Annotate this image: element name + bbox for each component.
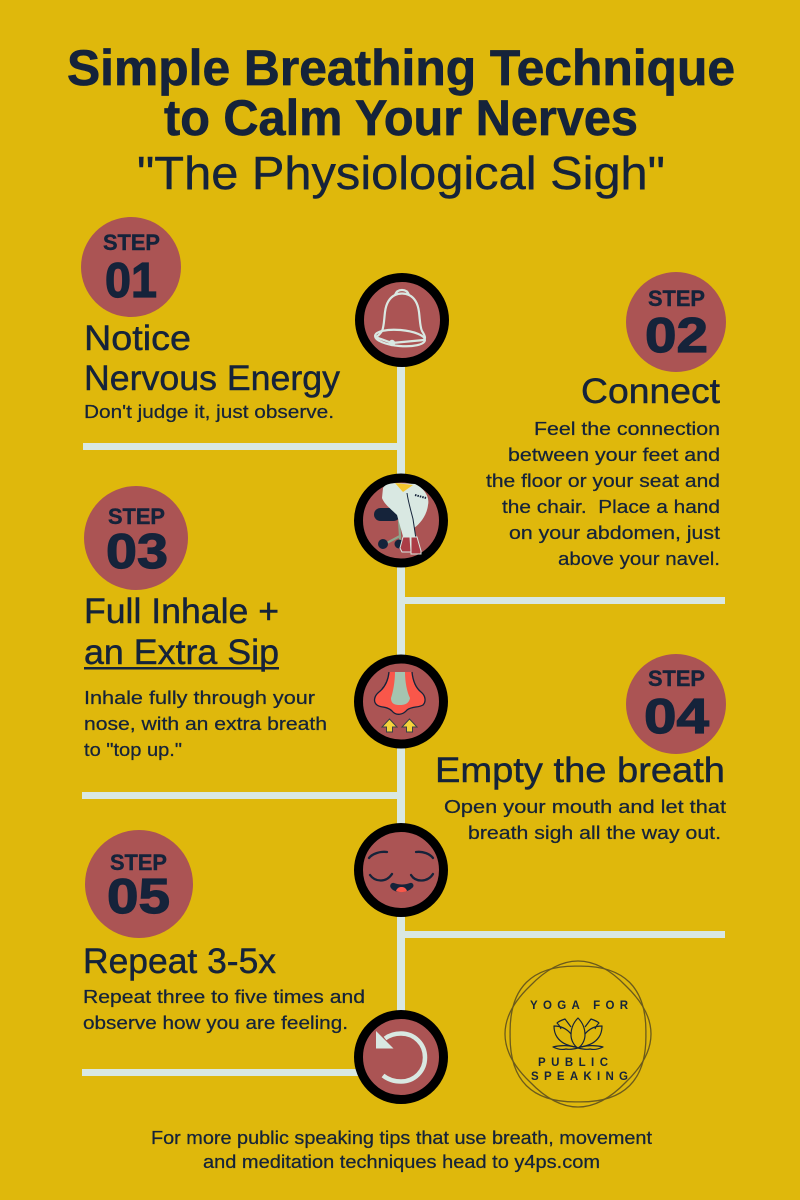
- step 4 badge: STEP: [648, 666, 705, 691]
- logo: [475, 931, 681, 1137]
- step 5 badge: [85, 830, 193, 938]
- logo badge outline: [475, 931, 681, 1137]
- logo wordmark: [530, 1000, 629, 1083]
- step 2 text: on your abdomen, just: [509, 522, 720, 543]
- footer text: and meditation techniques head to y4ps.com: [203, 1152, 600, 1172]
- step 2 text: the floor or your seat and: [486, 470, 720, 491]
- step 2 text: Feel the connection: [534, 418, 720, 439]
- step 5 text: Repeat three to five times and: [83, 986, 365, 1007]
- panel: step 1: [81, 217, 341, 422]
- step 4 badge: [626, 654, 726, 754]
- step 3 text: to "top up.": [84, 739, 182, 760]
- icon: lotus: [553, 1018, 603, 1049]
- step 5 heading: Repeat 3-5x: [83, 942, 277, 981]
- icon: nose: [358, 659, 444, 744]
- step 3 heading: an Extra Sip: [84, 633, 279, 672]
- step 1 heading: [84, 319, 341, 398]
- step 3 text: nose, with an extra breath: [84, 713, 327, 734]
- step 3 heading: Full Inhale +: [84, 592, 279, 631]
- step 2 badge: 02: [645, 309, 708, 363]
- icon: bell: [360, 278, 444, 362]
- panel: step 2: [486, 272, 726, 569]
- step 4 badge: 04: [644, 690, 709, 744]
- step 2 heading: Connect: [581, 372, 720, 411]
- step 3 text: [84, 687, 327, 760]
- step 2 text: the chair. Place a hand: [502, 496, 720, 517]
- step 3 badge: [84, 486, 188, 590]
- step 1 text: Don't judge it, just observe.: [84, 401, 334, 422]
- step 1 heading: Notice: [84, 319, 191, 358]
- icon: sighing face: [358, 828, 444, 912]
- step 1 heading: Nervous Energy: [84, 359, 341, 398]
- step 4 text: Open your mouth and let that: [444, 796, 726, 817]
- timeline: [82, 320, 725, 1076]
- step 2 text: [486, 418, 720, 569]
- step 5 text: observe how you are feeling.: [83, 1012, 348, 1033]
- step 3 text: Inhale fully through your: [84, 687, 315, 708]
- step 3 badge: 03: [106, 525, 168, 579]
- step 1 badge: STEP: [103, 230, 160, 255]
- step 4 text: breath sigh all the way out.: [468, 822, 721, 843]
- chair: [374, 508, 404, 549]
- step 1 badge: 01: [105, 254, 157, 308]
- footer text: [151, 1128, 652, 1172]
- logo wordmark: YOGA FOR: [530, 1000, 629, 1012]
- step 5 badge: 05: [107, 870, 170, 924]
- icon: repeat arrow: [358, 1014, 444, 1100]
- legs: [382, 483, 428, 542]
- title: Simple Breathing Technique: [67, 40, 735, 96]
- step 5 text: [83, 986, 365, 1033]
- footer text: For more public speaking tips that use breath, movement: [151, 1128, 652, 1148]
- step 1 badge: [81, 217, 181, 317]
- logo wordmark: SPEAKING: [531, 1071, 628, 1083]
- step 2 badge: STEP: [648, 286, 705, 311]
- panel: step 3: [84, 486, 327, 760]
- title: [67, 40, 735, 199]
- step 4 text: [444, 796, 726, 843]
- title: "The Physiological Sigh": [137, 147, 665, 199]
- step 3 heading: [84, 592, 279, 672]
- panel: step 5: [83, 830, 365, 1033]
- logo wordmark: PUBLIC: [538, 1057, 608, 1069]
- step 5 badge: STEP: [110, 850, 167, 875]
- icon: seated person: [358, 478, 444, 563]
- step 2 text: between your feet and: [508, 444, 720, 465]
- step 2 badge: [626, 272, 726, 372]
- shoes: [400, 537, 411, 552]
- step 3 badge: STEP: [108, 504, 165, 529]
- step 2 text: above your navel.: [558, 548, 720, 569]
- step 4 heading: Empty the breath: [435, 751, 725, 790]
- panel: step 4: [435, 654, 726, 843]
- title: to Calm Your Nerves: [164, 90, 638, 146]
